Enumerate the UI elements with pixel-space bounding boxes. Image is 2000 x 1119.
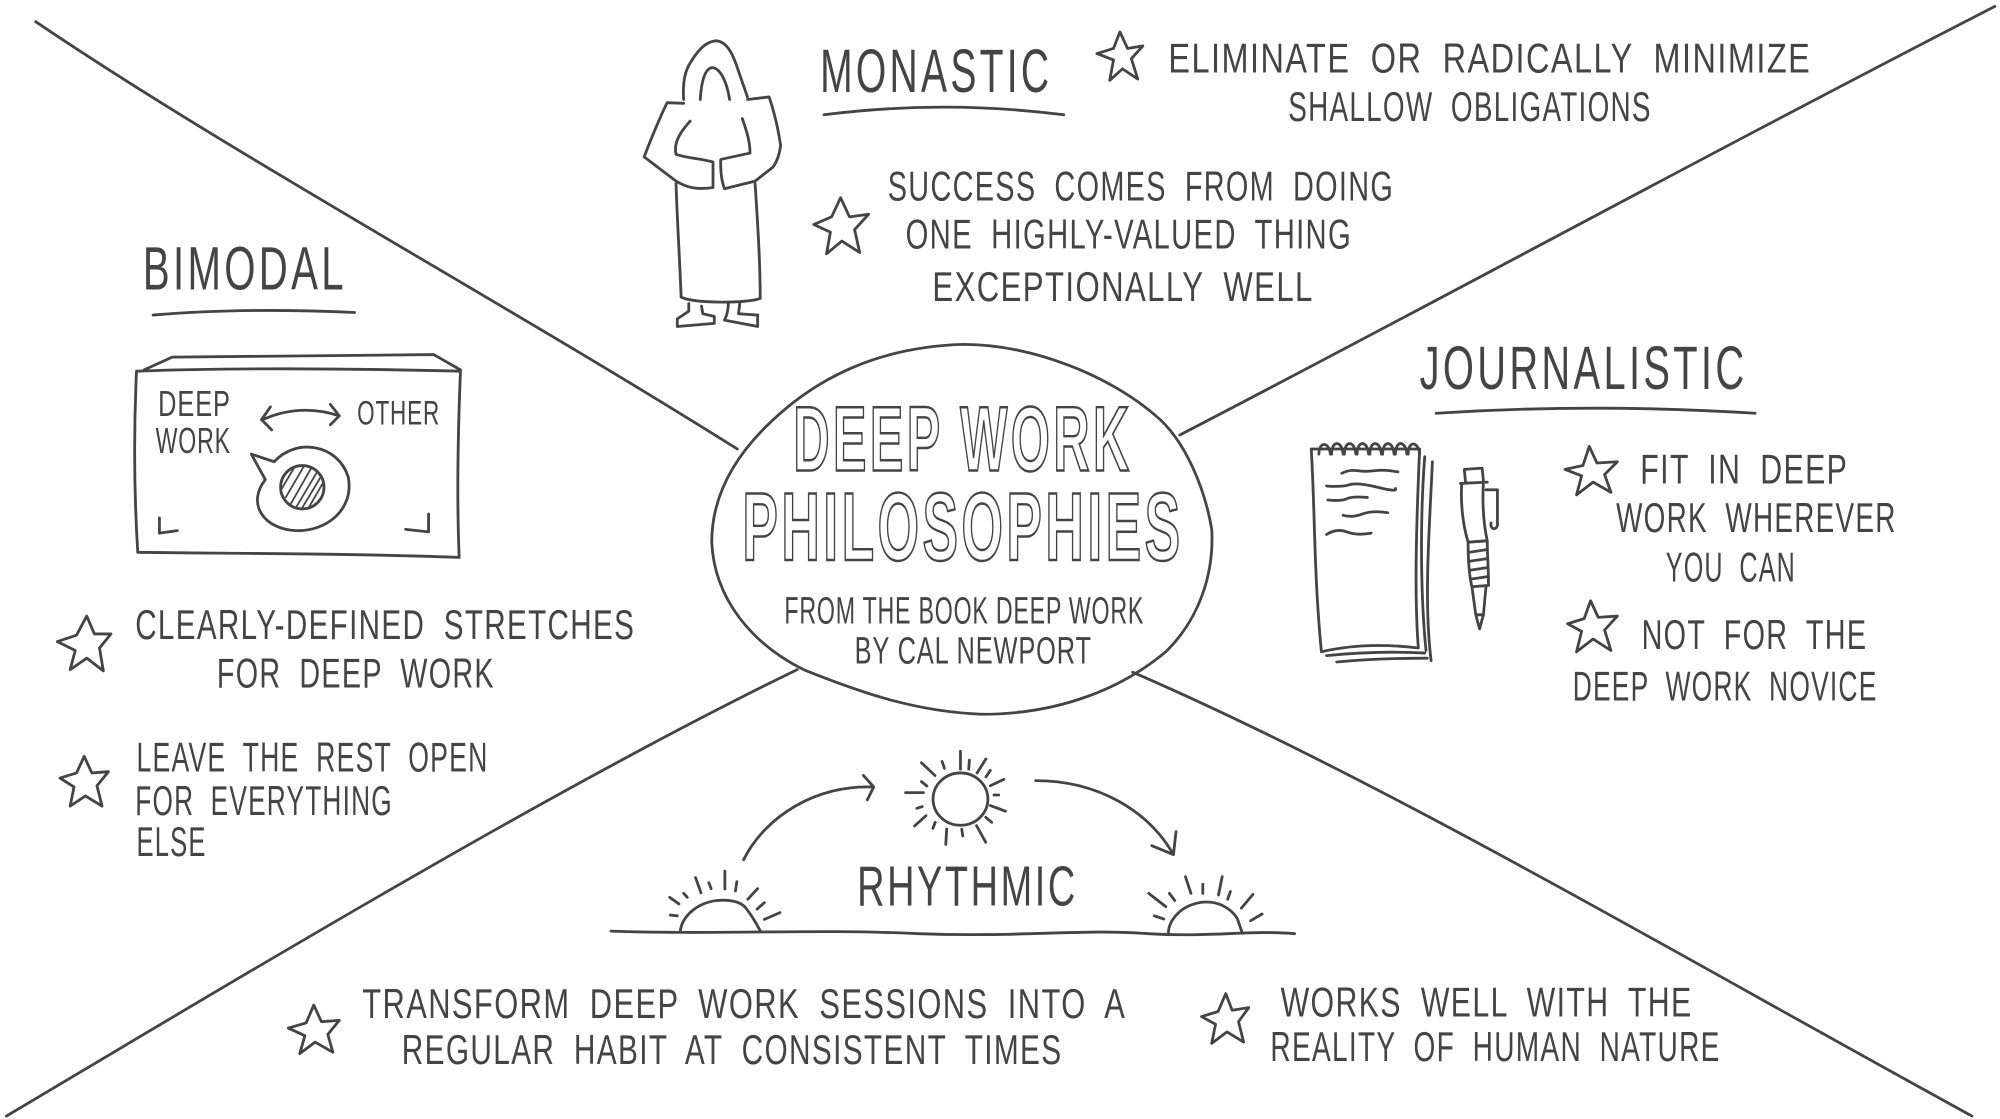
subtitle: BY CAL NEWPORT (855, 629, 1092, 672)
icon: star (1565, 446, 1617, 495)
title: PHILOSOPHIES (742, 472, 1184, 581)
arrow: rising (744, 776, 874, 860)
text: eliminate: ELIMINATE OR RADICALLY MINIMIZE (1168, 35, 1811, 82)
text: clearly defined (135, 601, 635, 696)
icon: hooded monk (644, 41, 781, 327)
icon: pen (1460, 468, 1497, 629)
text: eliminate (1168, 35, 1811, 130)
panel: bimodal (57, 235, 635, 865)
icon: notepad (1311, 444, 1432, 662)
panel: rhythmic (288, 751, 1721, 1073)
text: success (888, 162, 1394, 310)
text: fit in deep work: FIT IN DEEP (1640, 445, 1848, 492)
panel: journalistic (1311, 334, 1897, 709)
text: not for novice: NOT FOR THE (1642, 611, 1867, 658)
text: success: SUCCESS COMES FROM DOING (888, 162, 1394, 209)
text: transform (362, 980, 1126, 1073)
panel: monastic (644, 32, 1811, 327)
arrow: setting (1036, 781, 1176, 855)
icon: star (1568, 601, 1617, 652)
icon: sun path over horizon (611, 751, 1295, 935)
text: transform: REGULAR HABIT AT CONSISTENT TIMES (402, 1026, 1062, 1073)
underline: monastic (824, 107, 1064, 115)
box label: deep work (156, 384, 231, 461)
text: clearly defined: CLEARLY-DEFINED STRETCHES (135, 601, 635, 648)
icon: star (1202, 994, 1249, 1043)
blob outline (712, 344, 1212, 714)
box label: deep work: DEEP (158, 384, 231, 424)
text: eliminate: SHALLOW OBLIGATIONS (1288, 83, 1652, 130)
icon: star (1097, 32, 1143, 80)
subtitle (784, 590, 1144, 672)
text: human nature (1270, 979, 1721, 1070)
icon: star (60, 756, 108, 806)
text: success: ONE HIGHLY-VALUED THING (906, 211, 1352, 258)
text: not for novice (1573, 611, 1878, 709)
title (742, 389, 1184, 581)
icon: star (57, 616, 111, 671)
underline: bimodal (153, 310, 355, 315)
icon: calendar box (135, 355, 460, 557)
centre panel: title blob (712, 344, 1212, 714)
heading: journalistic: JOURNALISTIC (1420, 334, 1747, 402)
title: DEEP WORK (793, 389, 1133, 491)
text: leave the rest open (135, 734, 489, 865)
text: success: EXCEPTIONALLY WELL (932, 263, 1314, 310)
text: human nature: WORKS WELL WITH THE (1281, 979, 1693, 1026)
box label: deep work: WORK (156, 421, 231, 461)
heading: bimodal: BIMODAL (143, 235, 347, 303)
heading: monastic: MONASTIC (820, 37, 1052, 105)
icon: star (288, 1005, 339, 1054)
text: transform: TRANSFORM DEEP WORK SESSIONS INTO A (362, 980, 1126, 1027)
text: leave the rest open: ELSE (136, 818, 207, 865)
icon: star (814, 198, 869, 254)
text: leave the rest open: LEAVE THE REST OPEN (136, 734, 489, 781)
box label: other: OTHER (357, 395, 440, 433)
text: human nature: REALITY OF HUMAN NATURE (1270, 1023, 1721, 1070)
text: leave the rest open: FOR EVERYTHING (135, 777, 393, 824)
heading: rhythmic: RHYTHMIC (857, 855, 1078, 918)
text: fit in deep work: YOU CAN (1666, 544, 1796, 591)
underline: journalistic (1436, 408, 1755, 413)
text: clearly defined: FOR DEEP WORK (217, 649, 495, 696)
text: fit in deep work (1616, 445, 1897, 591)
subtitle: FROM THE BOOK DEEP WORK (784, 590, 1144, 633)
